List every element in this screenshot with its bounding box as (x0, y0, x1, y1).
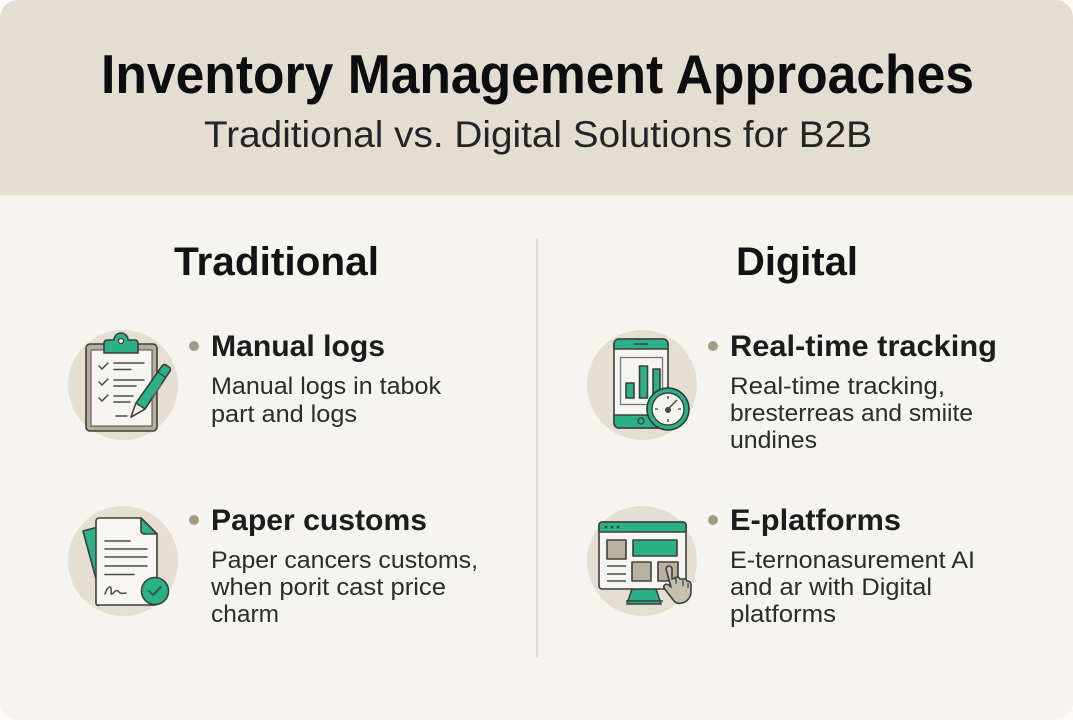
item text: E-ternonasurement AI (730, 547, 975, 574)
item text: platforms (730, 601, 836, 628)
item text: and ar with Digital (730, 574, 932, 601)
item: paper customs (68, 504, 478, 628)
bullet (708, 341, 718, 351)
item text: Paper cancers customs, (211, 547, 478, 574)
item: real-time tracking (587, 330, 997, 454)
header band (0, 0, 1073, 195)
item text: bresterreas and smiite (730, 400, 973, 427)
item text: charm (211, 601, 279, 628)
item heading: E-platforms (730, 504, 901, 537)
subtitle: Traditional vs. Digital Solutions for B2B (204, 114, 872, 155)
heading: traditional: Traditional (174, 240, 379, 284)
heading: digital: Digital (736, 240, 858, 284)
item: e-platforms (587, 504, 975, 628)
icon: signed document (68, 506, 178, 616)
item text: Manual logs in tabok (211, 373, 442, 400)
item text: when porit cast price (210, 574, 446, 601)
item heading: Manual logs (211, 330, 385, 363)
icon: phone with chart and gauge (587, 330, 697, 440)
title: Inventory Management Approaches (101, 43, 974, 105)
bullet (189, 341, 199, 351)
icon: clipboard and pen (68, 330, 178, 440)
item heading: Real-time tracking (730, 330, 997, 363)
icon: web platform with hand cursor (587, 506, 697, 616)
item text: Real-time tracking, (730, 373, 945, 400)
item: manual logs (68, 330, 442, 440)
item text (211, 373, 442, 428)
item heading: Paper customs (211, 504, 427, 537)
item text: undines (730, 427, 817, 454)
bullet (189, 515, 199, 525)
item text: part and logs (211, 401, 357, 428)
item text (210, 547, 478, 628)
panel: digital (587, 240, 997, 628)
item text (730, 373, 973, 454)
item text (730, 547, 975, 628)
bullet (708, 515, 718, 525)
panel: traditional (68, 240, 478, 628)
